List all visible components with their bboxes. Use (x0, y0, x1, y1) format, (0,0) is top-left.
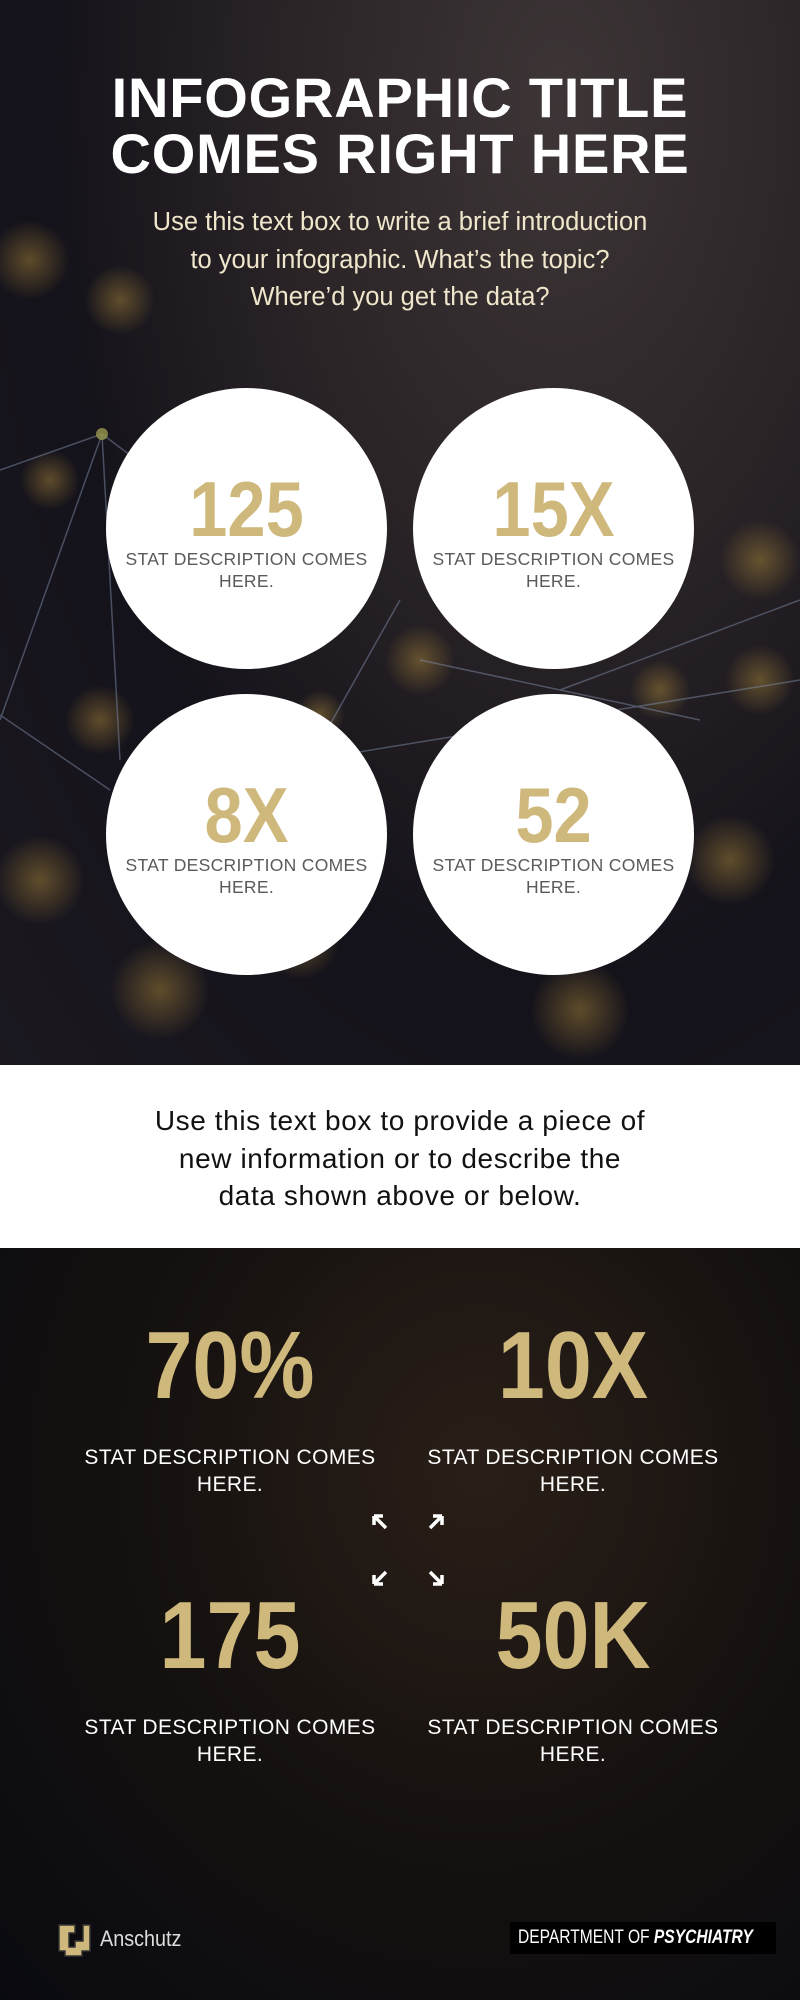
stat: 10X (427, 1312, 719, 1496)
bottom background panel (0, 1248, 800, 2000)
stat circle: 8X: 8X (205, 771, 288, 859)
stat: 50K: HERE. (540, 1743, 606, 1766)
intro text: Use this text box to write a brief introduction (153, 208, 647, 236)
stat circle: 52 (413, 694, 694, 975)
stat: 175: 175 (160, 1582, 300, 1689)
intro text: to your infographic. What’s the topic? (190, 246, 610, 274)
stat: 50K: 50K (496, 1582, 650, 1689)
stat: 10X: HERE. (540, 1473, 606, 1496)
stat circle: 15X (413, 388, 694, 669)
intro text: Where’d you get the data? (250, 283, 550, 311)
logo: CU Anschutz (58, 1924, 181, 1957)
stat: 70% (84, 1312, 376, 1496)
stat circle: 52: 52 (515, 771, 592, 859)
stat circle: 15X: HERE. (526, 571, 581, 591)
stat circle: 8X: HERE. (219, 877, 274, 897)
stat circle: 52: STAT DESCRIPTION COMES (433, 855, 674, 875)
logo: CU Anschutz: Anschutz (100, 1926, 181, 1951)
stat circle: 8X: STAT DESCRIPTION COMES (126, 855, 367, 875)
stat circle: 125 (106, 388, 387, 669)
stat: 70%: 70% (145, 1312, 315, 1419)
department badge (510, 1922, 776, 1954)
stat: 175: STAT DESCRIPTION COMES (84, 1716, 376, 1739)
stat: 175: HERE. (197, 1743, 263, 1766)
white info band: Use this text box to provide a piece of (155, 1105, 645, 1136)
department badge: DEPARTMENT OF PSYCHIATRY (518, 1927, 753, 1948)
top background panel (0, 0, 800, 1065)
stat: 175 (84, 1582, 376, 1766)
white info band (0, 1065, 800, 1248)
stat circle: 8X (106, 694, 387, 975)
white info band: new information or to describe the (179, 1142, 621, 1174)
stat: 10X: STAT DESCRIPTION COMES (427, 1446, 719, 1469)
stat circle: 125: STAT DESCRIPTION COMES (126, 549, 367, 569)
stat: 50K (427, 1582, 719, 1766)
stat circle: 125: 125 (189, 465, 304, 553)
stat circle: 15X: STAT DESCRIPTION COMES (433, 549, 674, 569)
white info band: data shown above or below. (219, 1180, 581, 1211)
intro text (153, 208, 647, 311)
title (110, 66, 690, 185)
stat: 70%: HERE. (197, 1473, 263, 1496)
stat circle: 52: HERE. (526, 877, 581, 897)
icon: expand arrows (372, 1514, 444, 1586)
stat circle: 15X: 15X (492, 465, 615, 553)
title: INFOGRAPHIC TITLE (112, 66, 688, 129)
stat: 50K: STAT DESCRIPTION COMES (427, 1716, 719, 1739)
stat: 10X: 10X (498, 1312, 648, 1419)
stat circle: 125: HERE. (219, 571, 274, 591)
stat: 70%: STAT DESCRIPTION COMES (84, 1446, 376, 1469)
title: COMES RIGHT HERE (110, 122, 690, 185)
